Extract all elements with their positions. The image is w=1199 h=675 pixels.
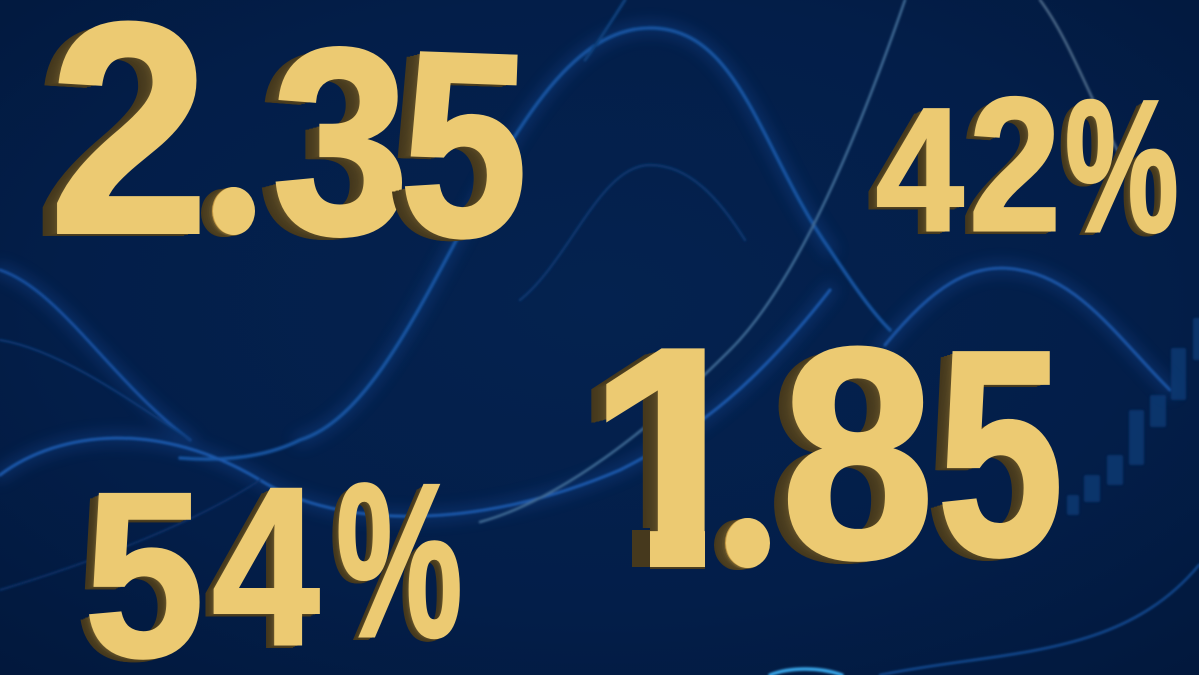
metric: 1.85: 1	[587, 284, 761, 632]
metric: 2.35	[42, 0, 533, 296]
metric: 1.85	[591, 285, 1064, 621]
metric: 42%: 2	[969, 59, 1061, 271]
metric: 54%	[80, 439, 463, 675]
metric: 42%	[868, 59, 1179, 271]
extruded foot of the digit one	[632, 530, 652, 567]
metric: 2.35: 5	[396, 0, 533, 293]
metric: 42%: 4	[876, 73, 964, 268]
metric: 42%: %	[1065, 61, 1179, 271]
metric: 1.85: 8	[781, 285, 935, 621]
metric: 1.85: 5	[937, 290, 1064, 616]
metric: 2.35: 3	[272, 0, 409, 290]
